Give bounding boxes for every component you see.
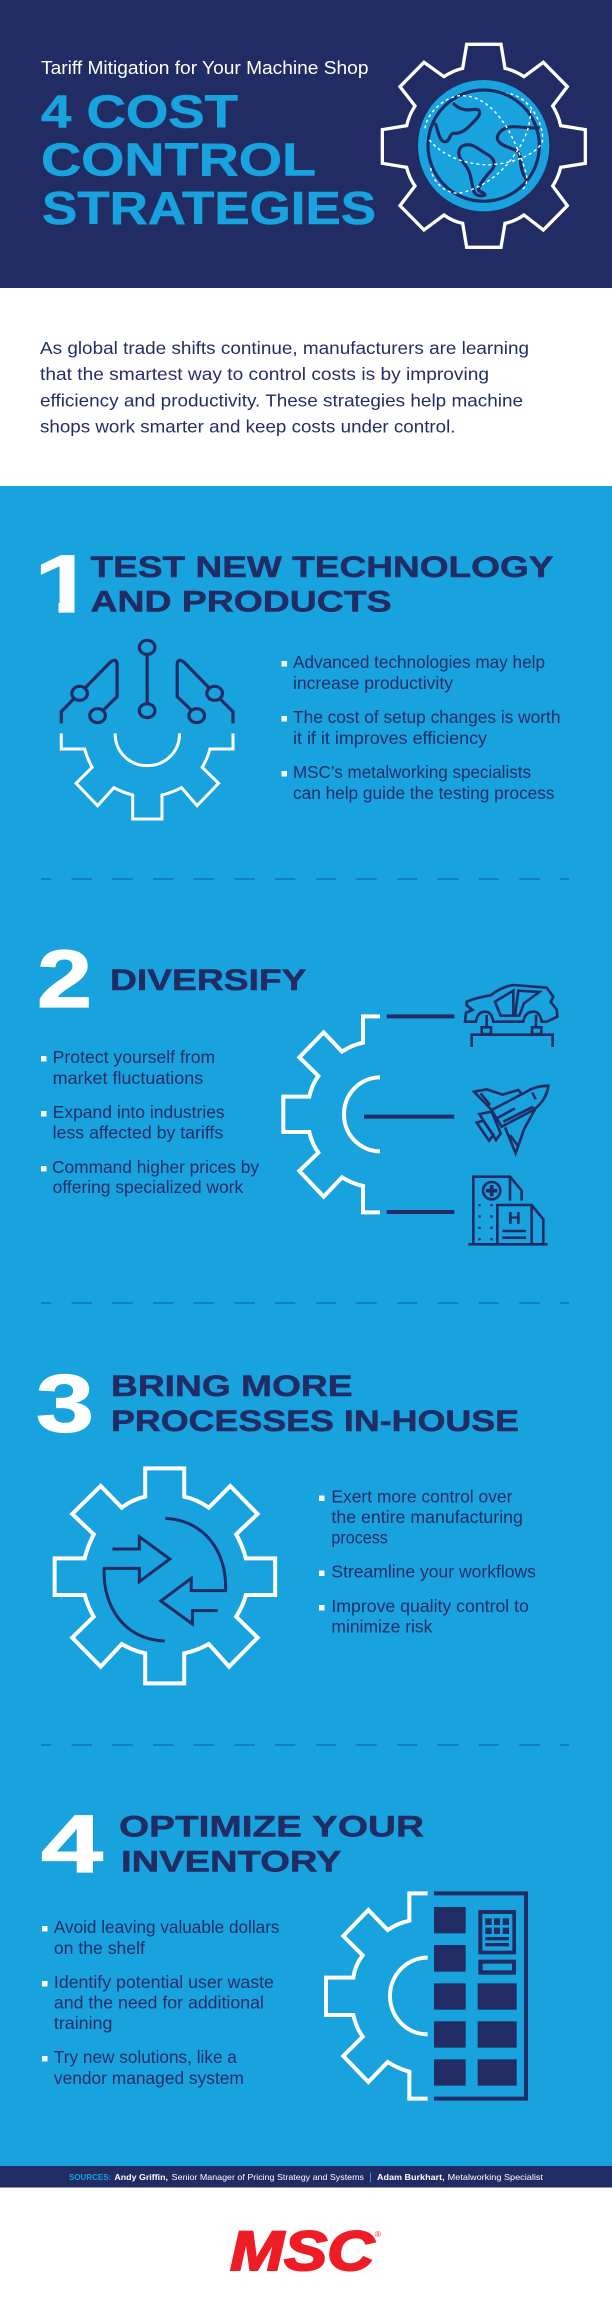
bullet list: vendor managed system xyxy=(54,2068,244,2088)
bullet list xyxy=(42,1917,280,2088)
heading: test new technology and products xyxy=(90,551,554,618)
sources text: Andy Griffin, xyxy=(114,2172,168,2182)
bullet list: on the shelf xyxy=(54,1938,145,1958)
bullet list: Identify potential user waste xyxy=(54,1972,274,1992)
bullet list: it if it improves efficiency xyxy=(293,728,487,748)
panel: strategy 1 xyxy=(34,539,560,819)
number 2: 2 xyxy=(37,934,92,1025)
logo: MSC: ® xyxy=(375,2230,381,2239)
bullet list: Streamline your workflows xyxy=(331,1562,536,1582)
icon: hospital: H xyxy=(508,1208,521,1228)
subtitle: Tariff Mitigation for Your Machine Shop xyxy=(41,58,368,78)
bullet list: Improve quality control to xyxy=(331,1596,529,1616)
sources text xyxy=(69,2172,544,2182)
icon: space shuttle xyxy=(474,1086,548,1153)
icon: half gear with vending machine xyxy=(326,1893,526,2099)
panel: sources bar xyxy=(0,2166,612,2188)
text block: intro: efficiency and productivity. These strategies help machine xyxy=(40,390,523,410)
icon: gear with globe xyxy=(382,44,585,247)
number 1: 1 xyxy=(34,539,97,630)
bullet list: Protect yourself from xyxy=(53,1047,215,1067)
bullet list: training xyxy=(54,2013,112,2033)
bullet list: market fluctuations xyxy=(53,1068,204,1088)
number 3: 3 xyxy=(36,1358,94,1450)
bullet list: Command higher prices by xyxy=(52,1157,259,1177)
sources text: Adam Burkhart, xyxy=(377,2172,445,2182)
text block: intro: As global trade shifts continue, manufacturers are learning xyxy=(40,338,529,358)
bullet list: Expand into industries xyxy=(53,1102,225,1122)
bullet list: MSC’s metalworking specialists xyxy=(293,762,531,782)
bullet list xyxy=(41,1047,259,1197)
bullet list: the entire manufacturing xyxy=(331,1507,523,1527)
heading: optimize your inventory: OPTIMIZE YOUR xyxy=(119,1811,424,1844)
title: CONTROL xyxy=(41,134,316,186)
icon: half gear with connectors xyxy=(283,1016,454,1212)
heading: optimize your inventory: INVENTORY xyxy=(121,1846,342,1879)
title: STRATEGIES xyxy=(42,182,376,234)
icon: car on lift xyxy=(465,985,557,1047)
icon: hospital xyxy=(468,1177,548,1244)
bullet list: process xyxy=(331,1528,388,1548)
bullet list: Avoid leaving valuable dollars xyxy=(54,1917,280,1937)
bullet list: The cost of setup changes is worth xyxy=(293,707,560,727)
heading: bring more processes in-house: PROCESSES IN-HOUSE xyxy=(111,1405,519,1438)
bullet list: Try new solutions, like a xyxy=(54,2047,237,2067)
title xyxy=(41,86,376,234)
heading: test new technology and products: AND PRODUCTS xyxy=(90,586,392,618)
panel: strategy 3 xyxy=(36,1358,536,1683)
heading: bring more processes in-house: BRING MORE xyxy=(111,1370,352,1403)
bullet list: increase productivity xyxy=(293,673,453,693)
sources text: Metalworking Specialist xyxy=(448,2172,544,2182)
sources text: SOURCES: xyxy=(69,2172,111,2182)
bullet list: offering specialized work xyxy=(53,1177,244,1197)
bullet list: minimize risk xyxy=(331,1617,433,1637)
heading: diversify: DIVERSIFY xyxy=(110,964,306,997)
panel: strategy 2 xyxy=(37,934,557,1244)
logo: MSC: MSC xyxy=(230,2219,376,2282)
bullet list: Advanced technologies may help xyxy=(293,652,545,672)
title: 4 COST xyxy=(41,86,238,138)
heading: optimize your inventory xyxy=(119,1811,424,1879)
text block: intro: that the smartest way to control costs is by improving xyxy=(40,364,489,384)
sources text: Senior Manager of Pricing Strategy and Systems xyxy=(172,2172,364,2182)
text block: intro xyxy=(40,338,529,436)
bullet list: less affected by tariffs xyxy=(53,1122,224,1142)
panel: strategy 4 xyxy=(41,1799,526,2099)
bullet list xyxy=(319,1487,536,1637)
icon: gear with circular arrows xyxy=(55,1468,275,1683)
bullet list: can help guide the testing process xyxy=(293,783,555,803)
bullet list: Exert more control over xyxy=(331,1487,513,1507)
heading: bring more processes in-house xyxy=(111,1370,519,1438)
number 4: 4 xyxy=(41,1799,104,1890)
panel: header xyxy=(0,0,612,288)
bullet list: and the need for additional xyxy=(54,1992,264,2012)
heading: test new technology and products: TEST NEW TECHNOLOGY xyxy=(90,551,554,584)
text block: intro: shops work smarter and keep costs under control. xyxy=(40,416,456,436)
bullet list xyxy=(282,652,560,803)
icon: gear with circuit xyxy=(61,640,233,819)
